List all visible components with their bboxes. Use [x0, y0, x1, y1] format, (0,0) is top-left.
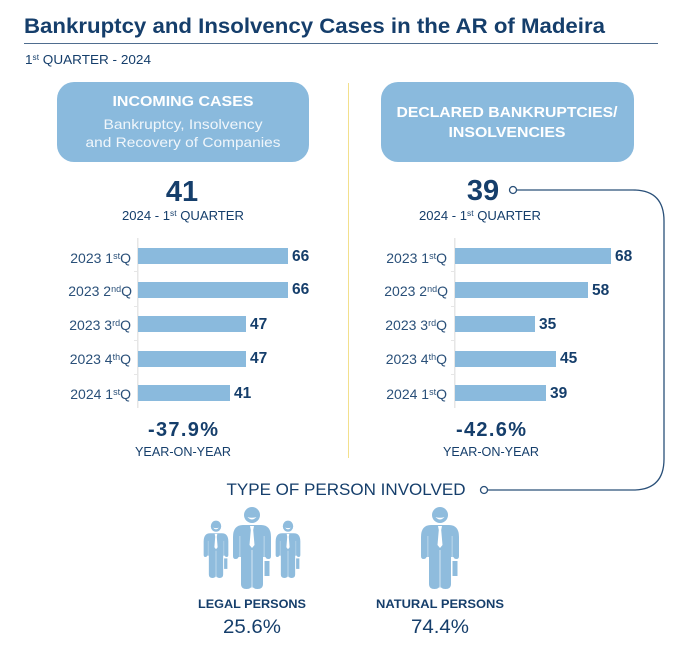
- headline caption: 2024 - 1: [419, 209, 465, 223]
- headline number: 39: 39: [467, 175, 499, 207]
- header box: incoming cases: [57, 82, 309, 162]
- headline caption: QUARTER: [474, 209, 541, 223]
- bar chart: incoming cases: st: [113, 251, 121, 261]
- bar chart: incoming cases: 2023 1: [70, 250, 113, 266]
- bar chart: incoming cases: 2023 4: [70, 351, 113, 367]
- bar chart: incoming cases: Q: [120, 250, 131, 266]
- panel: incoming cases: [57, 82, 310, 459]
- headline number: 41: 41: [166, 176, 198, 208]
- bar chart: declared bankruptcies: 58: [592, 282, 610, 299]
- bar chart: incoming cases: 2023 2: [68, 283, 111, 299]
- panel: declared bankruptcies: [381, 82, 634, 459]
- subtitle: QUARTER - 2024: [39, 52, 151, 67]
- subtitle: st: [33, 53, 40, 62]
- bar chart: declared bankruptcies: st: [429, 387, 437, 397]
- bar chart: declared bankruptcies: th: [429, 352, 436, 362]
- connector arrow: [480, 186, 664, 494]
- bar chart: declared bankruptcies: Q: [436, 250, 447, 266]
- bar chart: incoming cases: 66: [292, 281, 310, 298]
- bar chart: incoming cases: Q: [120, 317, 131, 333]
- bar chart: declared bankruptcies: 68: [615, 248, 633, 265]
- bar chart: declared bankruptcies: 2024 1: [386, 386, 429, 402]
- header box: incoming cases: INCOMING CASES: [112, 94, 254, 110]
- year-on-year caption: YEAR-ON-YEAR: [135, 445, 231, 459]
- bar chart: declared bankruptcies: nd: [427, 284, 437, 294]
- section heading: type of person: TYPE OF PERSON INVOLVED: [226, 481, 466, 499]
- bar chart: declared bankruptcies: 2023 1: [386, 250, 429, 266]
- bar chart: incoming cases: [68, 238, 310, 408]
- value: natural persons: 74.4%: [411, 617, 469, 638]
- headline caption: st: [467, 209, 474, 218]
- bar chart: incoming cases: 66: [292, 248, 310, 265]
- bar chart: declared bankruptcies: 35: [539, 316, 557, 333]
- bar chart: declared bankruptcies: Q: [437, 283, 448, 299]
- bar chart: declared bankruptcies: Q: [436, 386, 447, 402]
- bar chart: incoming cases: 2023 3: [69, 317, 112, 333]
- bar chart: incoming cases: 47: [250, 350, 267, 367]
- bar chart: declared bankruptcies: [384, 238, 633, 408]
- icon: legal persons: [204, 507, 300, 589]
- label: natural persons: NATURAL PERSONS: [376, 597, 504, 611]
- value: legal persons: 25.6%: [223, 617, 281, 638]
- title: Bankruptcy and Insolvency Cases in the AR of Madeira: [24, 14, 606, 38]
- header box: incoming cases: and Recovery of Companies: [86, 134, 280, 150]
- year-on-year change: declared: -42.6%: [456, 419, 526, 441]
- header box: incoming cases: Bankruptcy, Insolvency: [104, 116, 262, 132]
- panel divider: [348, 83, 349, 458]
- bar chart: incoming cases: st: [113, 387, 121, 397]
- bar chart: declared bankruptcies: Q: [436, 317, 447, 333]
- label: legal persons: LEGAL PERSONS: [198, 597, 306, 611]
- headline caption: 2024 - 1: [122, 209, 168, 223]
- bar chart: incoming cases: nd: [111, 284, 121, 294]
- bar chart: declared bankruptcies: 2023 4: [386, 351, 429, 367]
- bar chart: declared bankruptcies: st: [429, 251, 437, 261]
- year-on-year change: incoming: -37.9%: [148, 419, 218, 441]
- bar chart: incoming cases: 47: [250, 316, 267, 333]
- subtitle: 1: [25, 52, 32, 67]
- bar chart: incoming cases: Q: [120, 386, 131, 402]
- bar chart: declared bankruptcies: Q: [436, 351, 447, 367]
- bar chart: incoming cases: th: [113, 352, 120, 362]
- bar chart: declared bankruptcies: 39: [550, 385, 568, 402]
- bar chart: incoming cases: Q: [120, 351, 131, 367]
- headline caption: QUARTER: [177, 209, 244, 223]
- headline caption: st: [170, 209, 177, 218]
- bar chart: incoming cases: 2024 1: [70, 386, 113, 402]
- bar chart: declared bankruptcies: rd: [428, 318, 436, 328]
- bar chart: declared bankruptcies: 2023 2: [384, 283, 427, 299]
- bar chart: declared bankruptcies: 45: [560, 350, 578, 367]
- bar chart: incoming cases: rd: [112, 318, 120, 328]
- icon: natural persons: [421, 507, 459, 589]
- title rule: [24, 43, 658, 44]
- header box: declared bankruptcies: INSOLVENCIES: [448, 125, 566, 141]
- header box: declared bankruptcies: [381, 82, 634, 162]
- year-on-year caption: YEAR-ON-YEAR: [443, 445, 539, 459]
- bar chart: incoming cases: Q: [121, 283, 132, 299]
- header box: declared bankruptcies: DECLARED BANKRUPTCIES/: [396, 105, 618, 121]
- bar chart: declared bankruptcies: 2023 3: [385, 317, 428, 333]
- bar chart: incoming cases: 41: [234, 385, 252, 402]
